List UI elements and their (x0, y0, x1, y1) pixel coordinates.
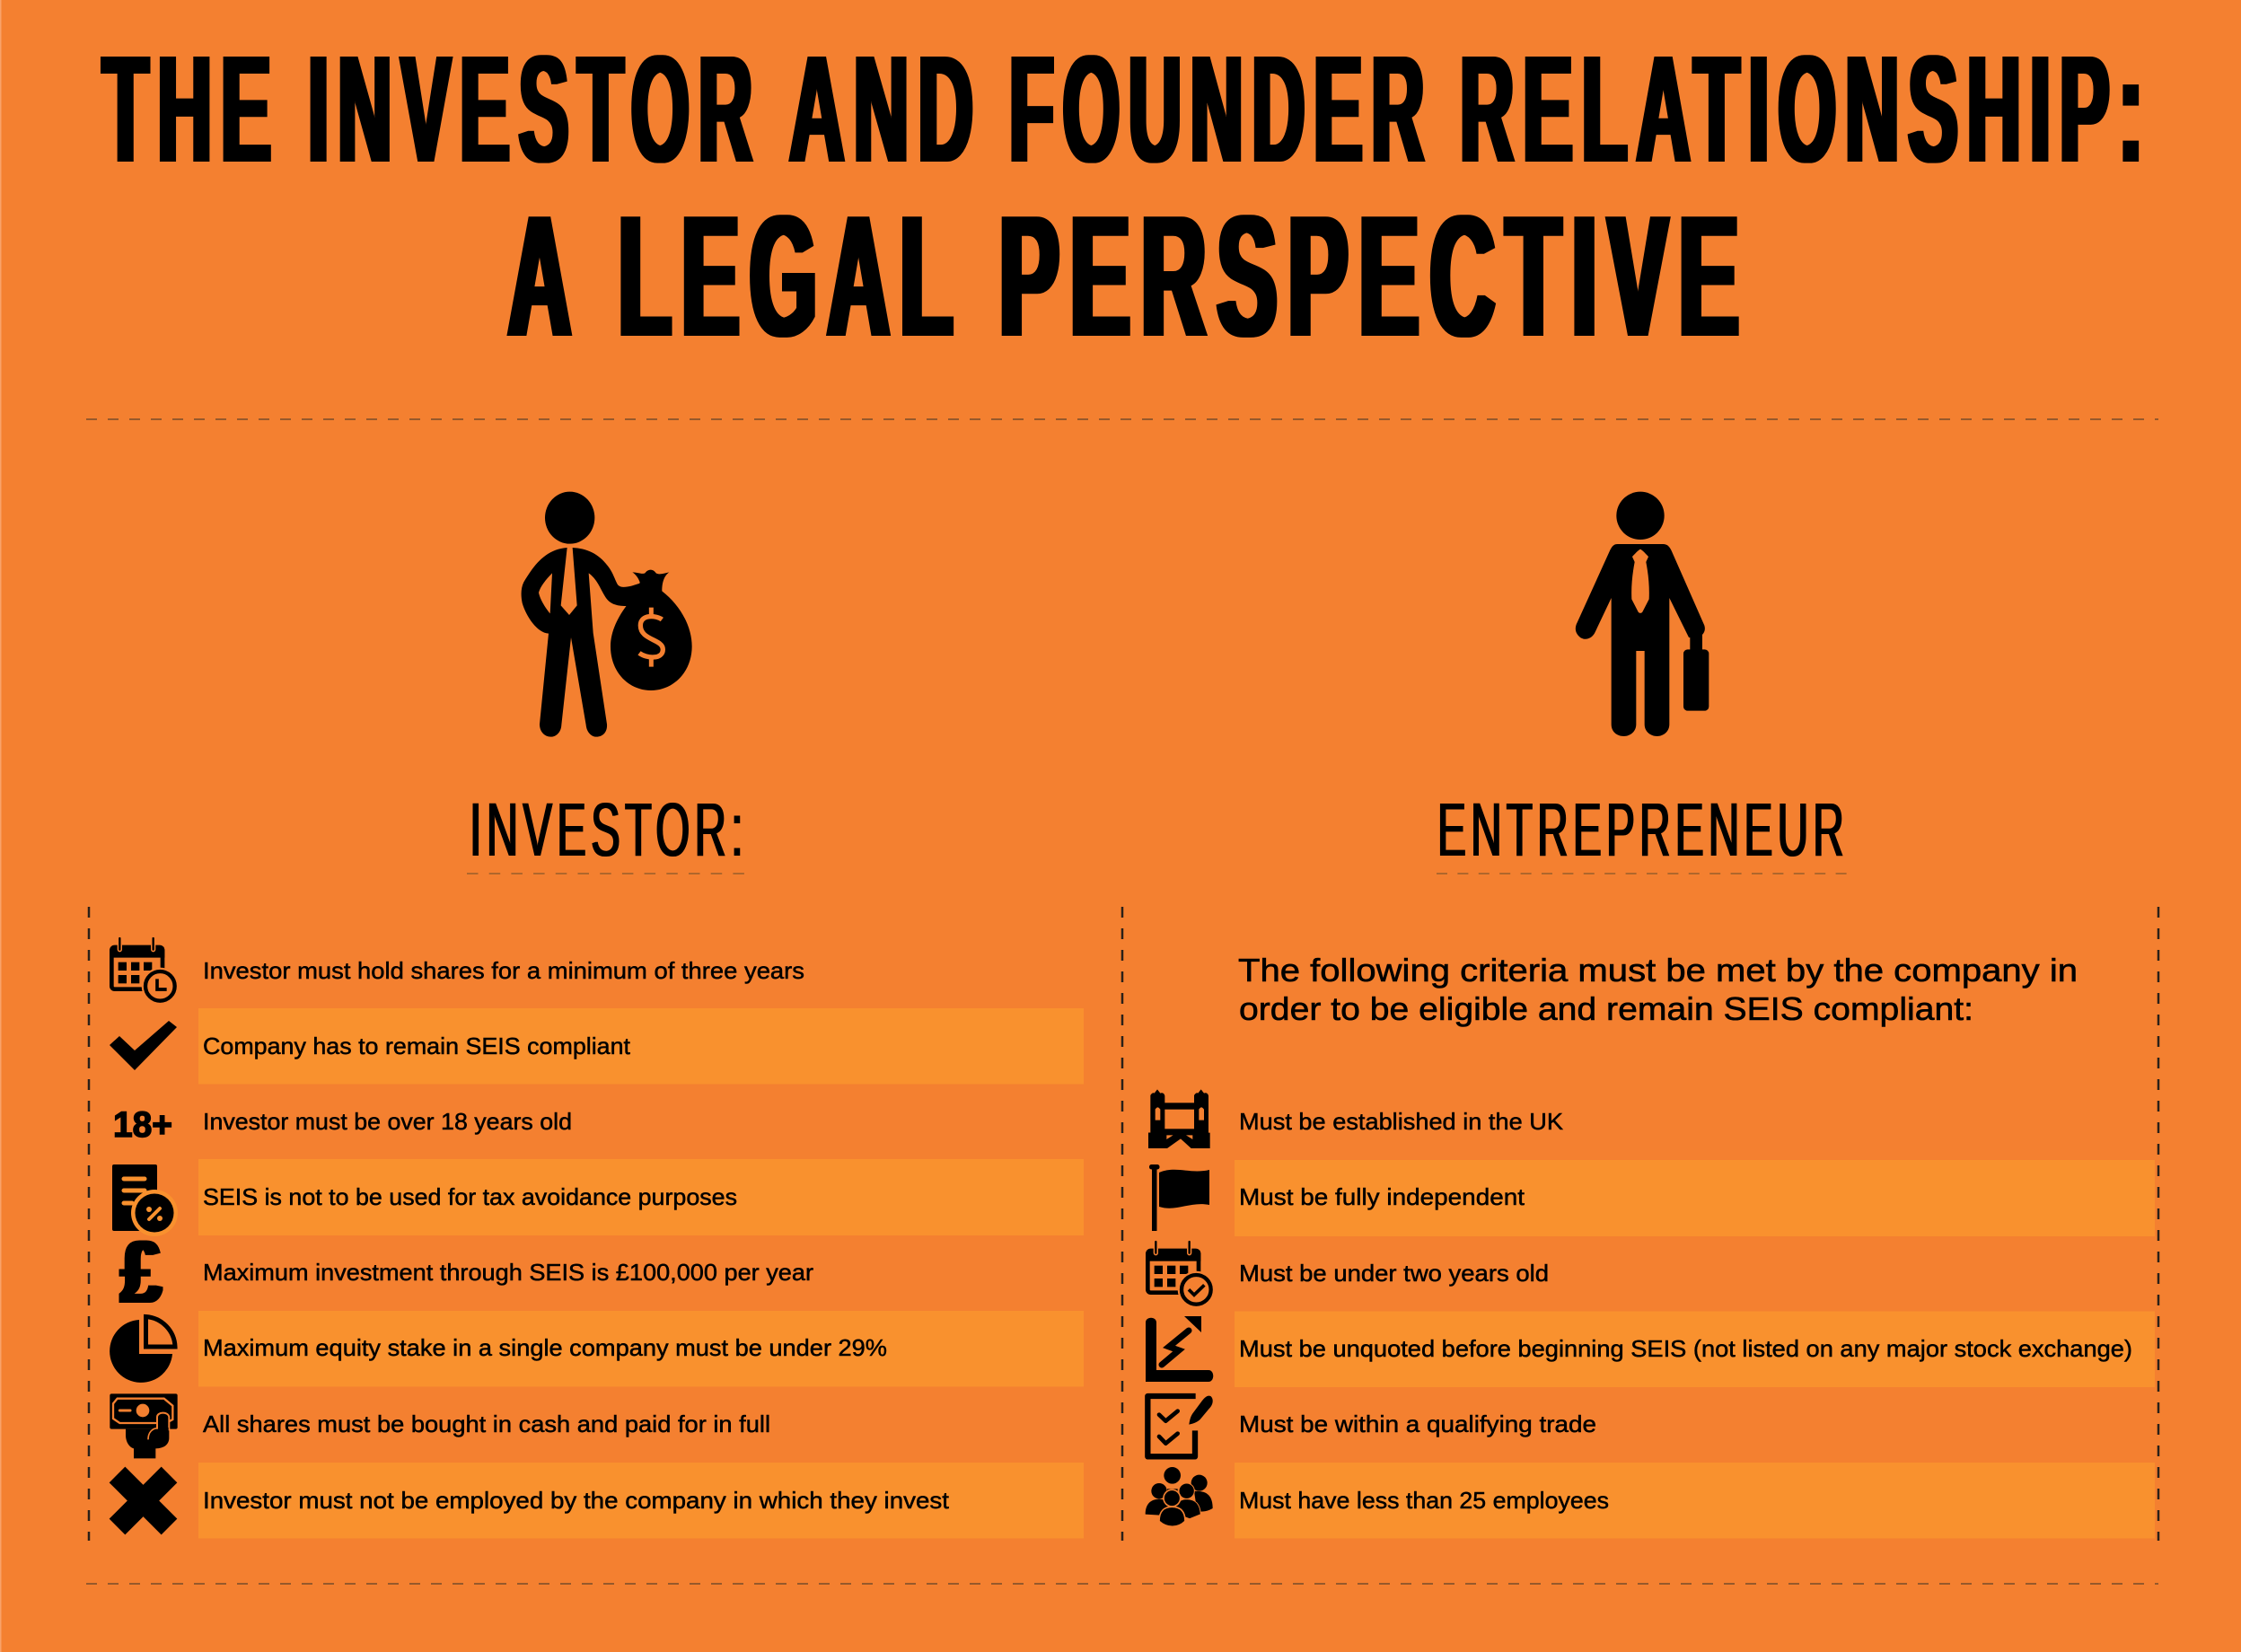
band (1235, 1463, 2155, 1539)
text: Investor must be over 18 years old (203, 1108, 572, 1135)
text: Maximum investment through SEIS is £100,000 per year (203, 1259, 813, 1286)
row: over 18 (113, 1105, 572, 1145)
title line 2: A (508, 179, 582, 373)
title line 1: FOUNDER (1009, 24, 1433, 195)
text: All shares must be bought in cash and paid for in full (203, 1410, 770, 1437)
icon: flag (1149, 1164, 1209, 1231)
heading: entrepreneur: ENTREPRENEUR (1437, 787, 1849, 872)
title (102, 24, 2152, 373)
icon: calendar with check (1146, 1242, 1215, 1308)
band (1235, 1160, 2155, 1236)
row: minimum three years (110, 938, 804, 1005)
text: Must have less than 25 employees (1239, 1487, 1609, 1514)
row: qualifying trade (1147, 1396, 1596, 1456)
band (198, 1008, 1084, 1085)
icon: checklist with pen (1147, 1396, 1213, 1456)
text: SEIS is not to be used for tax avoidance purposes (203, 1183, 737, 1210)
icon: tower bridge (1148, 1089, 1210, 1148)
intro text: The following criteria must be met by the company in (1238, 952, 2078, 989)
row: fully independent (1149, 1160, 2155, 1236)
text: Must be fully independent (1239, 1183, 1525, 1210)
row: not employed (117, 1463, 1084, 1539)
band (198, 1463, 1084, 1539)
band (198, 1159, 1084, 1235)
row: paid in cash (110, 1393, 770, 1458)
title line 1 (102, 24, 2152, 195)
row: no tax avoidance (112, 1159, 1084, 1236)
intro text: order to be eligible and remain SEIS compliant: (1239, 990, 1973, 1027)
icon: rising chart (1146, 1316, 1213, 1382)
heading: investor: INVESTOR: (470, 787, 748, 872)
text: Maximum equity stake in a single company must be under 29% (203, 1334, 887, 1361)
text: Must be unquoted before beginning SEIS (not listed on any major stock exchange) (1239, 1335, 2132, 1362)
icon: pie chart (110, 1316, 175, 1383)
row: unquoted (1146, 1311, 2155, 1387)
icon: pound sign: £ (121, 1222, 161, 1322)
row: maximum equity (110, 1311, 1084, 1386)
icon: hand holding cash (110, 1393, 178, 1458)
row: maximum investment (121, 1222, 813, 1322)
intro text (1238, 952, 2078, 1027)
figure: entrepreneur with briefcase (1576, 492, 1709, 736)
text: Investor must hold shares for a minimum of three years (203, 957, 804, 984)
text: Must be under two years old (1239, 1260, 1549, 1287)
panel: investor criteria (110, 938, 1084, 1539)
band (1235, 1311, 2155, 1387)
text: Company has to remain SEIS compliant (203, 1032, 631, 1059)
row: established in UK (1148, 1089, 1564, 1148)
text: Must be within a qualifying trade (1239, 1410, 1596, 1437)
panel: entrepreneur criteria (1146, 952, 2155, 1539)
row: SEIS compliant (110, 1008, 1084, 1085)
icon: group of people (1146, 1467, 1213, 1526)
title line 1: THE (102, 24, 280, 195)
icon: cross (117, 1474, 169, 1526)
title line 2: LEGAL (619, 179, 963, 373)
figure: investor with money bag (522, 492, 692, 737)
text: Investor must not be employed by the company in which they invest (203, 1487, 950, 1514)
icon: 18+: 18+ (113, 1105, 172, 1145)
title line 1: INVESTOR (308, 24, 761, 195)
icon: calendar with clock (110, 938, 179, 1005)
text: Must be established in the UK (1239, 1108, 1564, 1135)
icon: money bag (611, 570, 692, 690)
title line 2 (508, 179, 1750, 373)
icon: briefcase (1683, 635, 1709, 711)
icon: check mark (110, 1021, 177, 1070)
row: under two years (1146, 1242, 1549, 1308)
band (198, 1311, 1084, 1386)
icon: document with percent (112, 1164, 178, 1236)
row: under 25 employees (1146, 1463, 2155, 1539)
title line 1: AND (789, 24, 982, 195)
